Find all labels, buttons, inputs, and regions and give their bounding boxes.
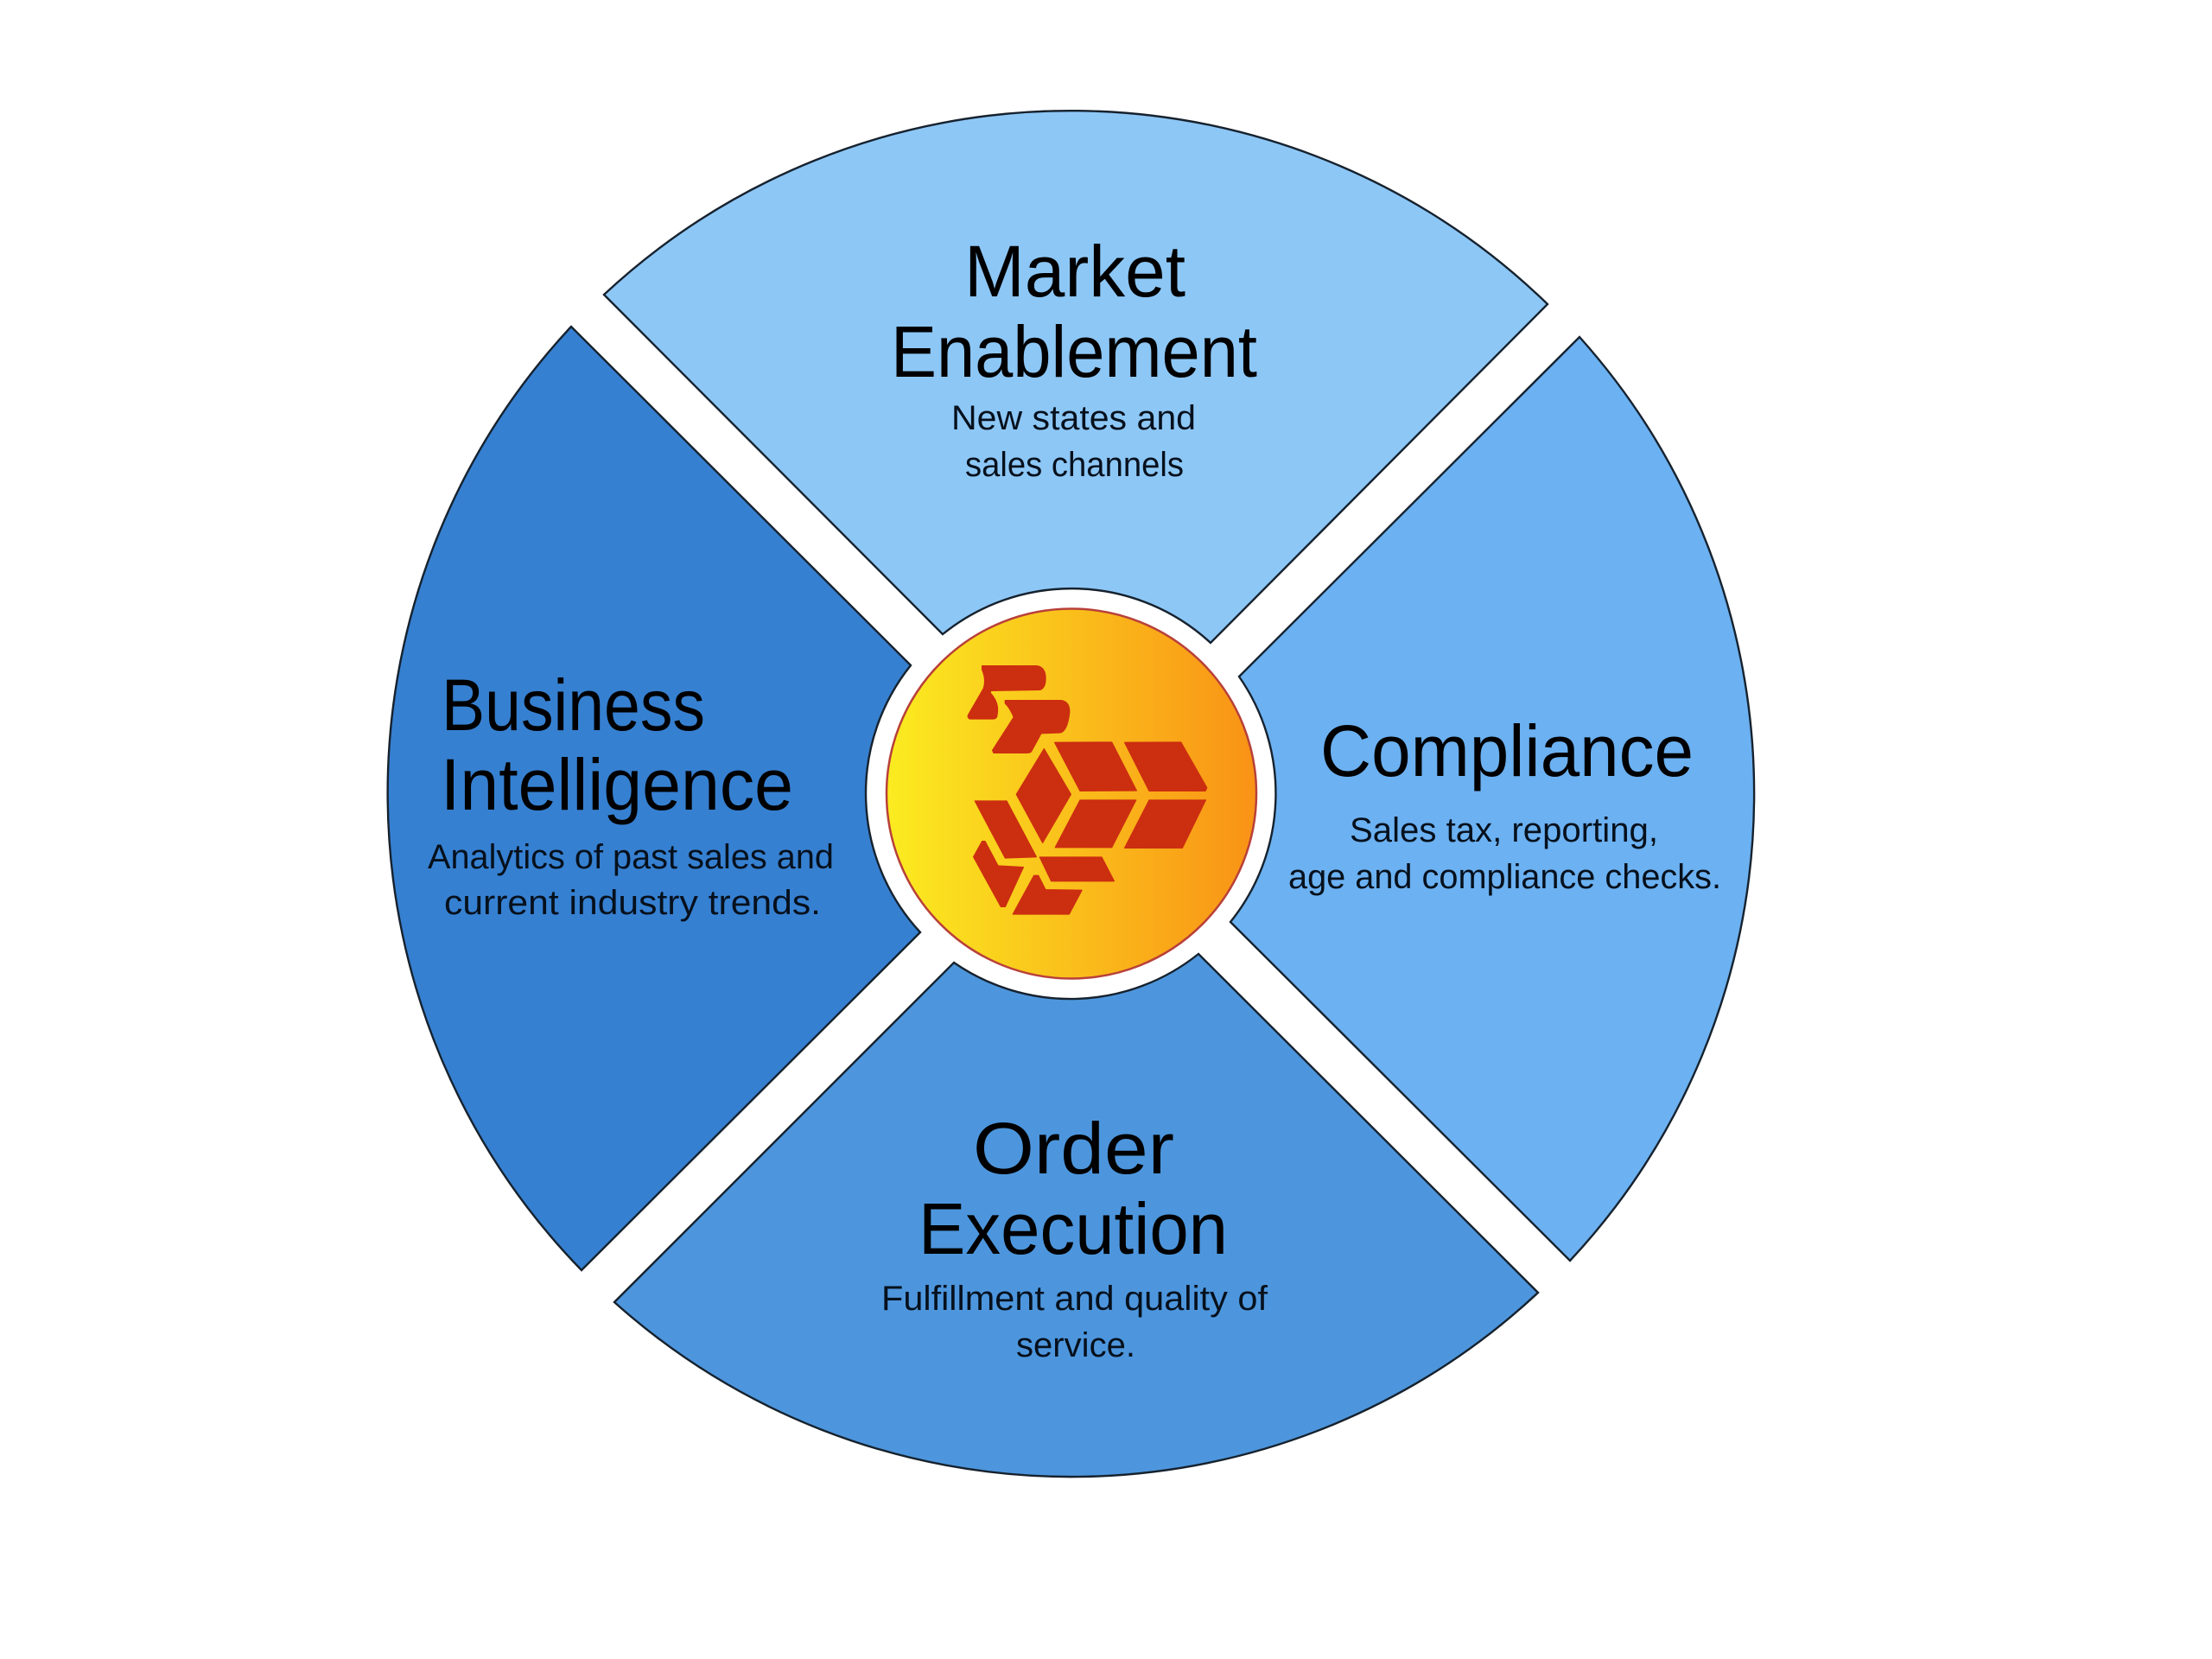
text: business intelligence description: Analytics of past sales and xyxy=(428,838,834,876)
heading: order execution xyxy=(918,1108,1228,1269)
text: compliance description: Sales tax, reporting, xyxy=(1350,811,1658,849)
text: market enablement description: sales channels xyxy=(965,446,1184,484)
heading: order execution: Execution xyxy=(918,1188,1228,1269)
text: order execution description xyxy=(881,1280,1268,1364)
text: market enablement description: New states and xyxy=(951,399,1196,437)
heading: market enablement: Market xyxy=(964,231,1185,312)
text: order execution description: Fulfillment and quality of xyxy=(881,1280,1268,1318)
panel: business intelligence xyxy=(388,327,920,1270)
heading: market enablement: Enablement xyxy=(891,311,1257,392)
heading: market enablement xyxy=(891,231,1257,392)
center logo xyxy=(887,608,1256,978)
heading: business intelligence: Intelligence xyxy=(441,744,793,825)
panel: order execution xyxy=(614,954,1538,1477)
text: compliance description: age and compliance checks. xyxy=(1288,858,1721,896)
heading: business intelligence xyxy=(441,664,793,825)
text: business intelligence description: current industry trends. xyxy=(444,884,821,922)
wedge: market enablement xyxy=(604,111,1548,643)
text: order execution description: service. xyxy=(1016,1326,1135,1364)
wedge: compliance xyxy=(1230,337,1754,1261)
wedge: business intelligence xyxy=(388,327,920,1270)
text: business intelligence description xyxy=(428,838,834,922)
heading: order execution: Order xyxy=(973,1108,1174,1189)
text: compliance description xyxy=(1288,811,1721,896)
logo disc xyxy=(887,608,1256,978)
panel: compliance xyxy=(1230,337,1754,1261)
panel: market enablement xyxy=(604,111,1548,643)
wedge: order execution xyxy=(614,954,1538,1477)
heading: compliance: Compliance xyxy=(1320,710,1694,791)
heading: business intelligence: Business xyxy=(442,664,705,746)
icon: logo cubes xyxy=(968,666,1207,914)
text: market enablement description xyxy=(951,399,1196,484)
